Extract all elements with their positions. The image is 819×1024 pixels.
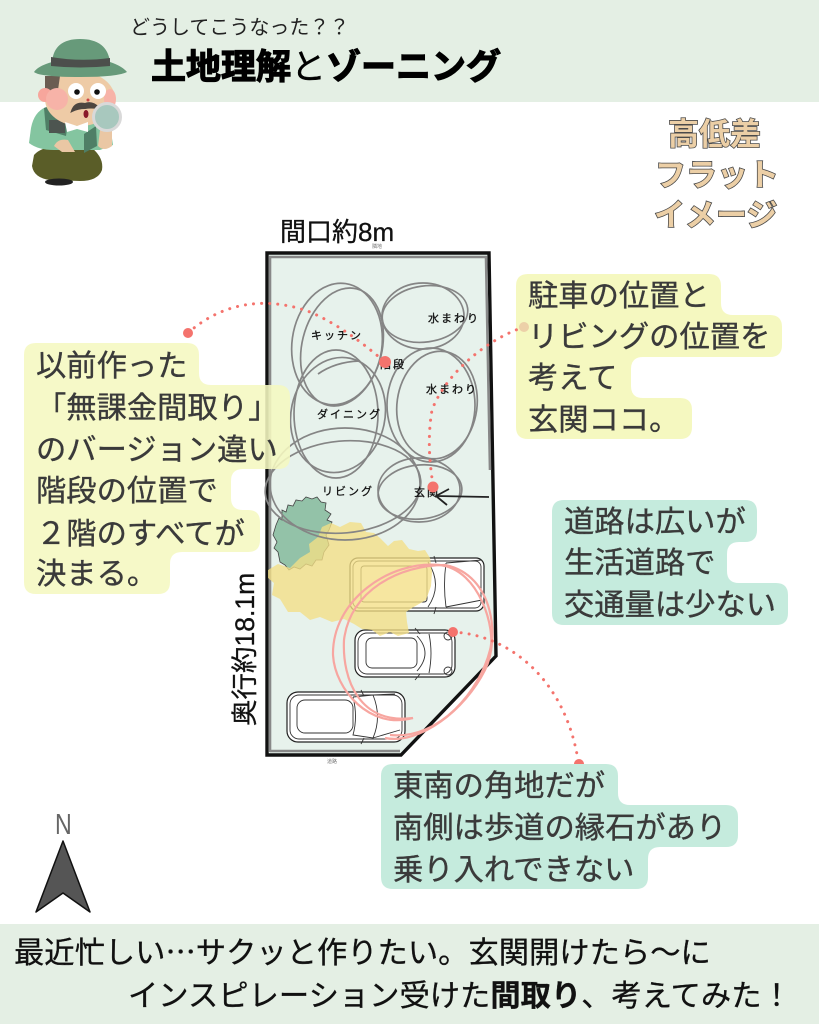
parking zone sketch: [333, 565, 492, 739]
edge notes: 隣地: [372, 243, 382, 250]
edge notes: [327, 243, 382, 765]
edge notes: 道路: [327, 758, 337, 765]
hat: [34, 39, 127, 77]
mustache: [72, 103, 99, 111]
dotted leader: bottom note to car: [448, 627, 584, 769]
title: ゾーニング: [326, 48, 501, 87]
callout: right note: リビングの位置を: [528, 320, 770, 354]
zone: bath 2: [387, 346, 484, 464]
callout: left note: 「無課金間取り」: [36, 391, 278, 425]
room labels: 水まわり: [428, 312, 480, 325]
mouth: [84, 110, 88, 118]
label: frontage: 間口約8m: [280, 217, 394, 247]
icon: north arrow: N: [55, 807, 72, 841]
zone: dining: [280, 348, 396, 482]
callout: corner lot note: 乗り入れできない: [393, 854, 634, 887]
label: elevation / flat / image: フラット: [655, 158, 779, 193]
callout: right note: 駐車の位置と: [528, 279, 710, 313]
room labels: ダイニング: [317, 407, 382, 421]
footer text: 最近忙しい…サクッと作りたい。玄関開けたら〜に: [14, 928, 711, 972]
callout: left note: 階段の位置で: [36, 474, 218, 508]
title: 土地理解: [151, 48, 291, 87]
callout: left note: のバージョン違い: [36, 433, 278, 467]
callout: left note: 以前作った: [36, 349, 187, 383]
holding hand: [98, 130, 112, 149]
room labels: 玄関: [414, 486, 440, 499]
callout: right note: 考えて: [528, 362, 617, 395]
shirt: [29, 104, 113, 150]
hand: [54, 140, 75, 152]
car 1: [350, 556, 484, 614]
label: elevation / flat / image: [654, 117, 779, 233]
yellow sunlight scribble: [268, 522, 432, 636]
dotted leader: left note to stairs: [183, 303, 391, 368]
room labels: リビング: [322, 484, 374, 498]
callout: left note: ２階のすべてが: [36, 517, 245, 551]
callout: left note: 決まる。: [36, 557, 157, 591]
footer text: [14, 928, 792, 1013]
callout: right note: [516, 274, 782, 439]
callout: left note: [24, 343, 290, 594]
room labels: [311, 312, 480, 499]
icon: detective character: [29, 39, 127, 186]
room labels: キッチン: [311, 329, 363, 342]
arrow: entrance: [436, 489, 489, 505]
car 3: [287, 690, 405, 744]
callout: road note: 生活道路で: [564, 546, 715, 580]
title: と: [291, 48, 326, 87]
shoe: [45, 178, 73, 186]
tree: [273, 497, 332, 570]
hair: [45, 76, 60, 92]
car 2: [355, 628, 455, 680]
footer text: インスピレーション受けた間取り、考えてみた！: [128, 979, 792, 1013]
dotted leader: right note to entrance: [428, 322, 529, 492]
label: elevation / flat / image: イメージ: [654, 198, 777, 233]
room zoning sketches: [261, 277, 484, 540]
callout: road note: 道路は広いが: [564, 505, 746, 539]
room labels: 水まわり: [426, 383, 478, 396]
callout: corner lot note: [381, 764, 738, 889]
eyes: [68, 83, 84, 99]
site plan: [261, 243, 496, 765]
hat band: [51, 57, 110, 68]
vest: [44, 104, 97, 153]
pants: [32, 147, 102, 181]
header band: [0, 0, 819, 102]
label: depth: 奥行約18.1m: [230, 573, 260, 726]
zone: kitchen: [284, 277, 395, 415]
inner boundary shadow: [270, 257, 490, 752]
title: [151, 48, 501, 87]
room labels: 階段: [380, 357, 406, 371]
zone: bath 1: [379, 280, 471, 349]
magnifier: [94, 104, 120, 130]
callout: right note: 玄関ココ。: [528, 403, 679, 437]
icon: north arrow: [36, 807, 90, 912]
callout: corner lot note: 東南の角地だが: [393, 769, 605, 803]
callout: corner lot note: 南側は歩道の縁石があり: [393, 811, 726, 845]
nose: [86, 98, 90, 102]
face: [45, 72, 115, 126]
callout: road note: 交通量は少ない: [564, 588, 776, 622]
cheeks: [38, 88, 52, 102]
zone: entrance: [375, 458, 465, 523]
subtitle: どうしてこうなった？？: [130, 16, 349, 39]
callout: road note: [552, 500, 788, 625]
label: elevation / flat / image: 高低差: [668, 117, 761, 152]
vest pockets: [49, 120, 65, 133]
bow tie: [65, 122, 88, 132]
site boundary: [267, 253, 496, 755]
footer band: [0, 924, 819, 1024]
zone: living: [261, 428, 425, 540]
